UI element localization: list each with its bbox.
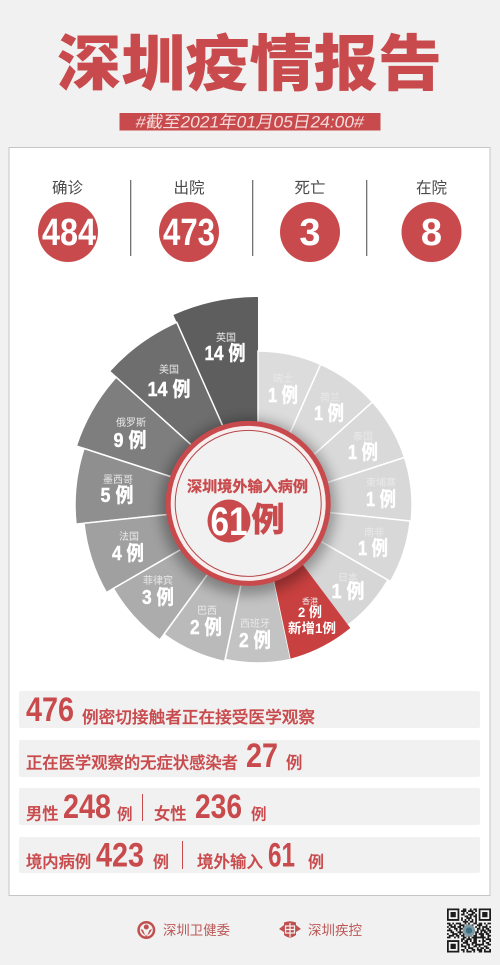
center badge: 深圳境外输入病例: [187, 476, 308, 496]
row: asymptomatic: 例: [286, 750, 302, 774]
stat: discharged: 出院: [173, 176, 205, 198]
row: close contacts: 例密切接触者正在接受医学观察: [82, 704, 316, 728]
wedge labels: 新增1例: [288, 620, 336, 636]
wedge labels: 4 例: [112, 542, 144, 565]
row: male and female: 女性: [154, 800, 187, 824]
stat: confirmed: 确诊: [52, 176, 83, 198]
footer logo: Shenzhen CDC: 深圳疾控: [308, 919, 362, 939]
row: male and female: 例: [251, 802, 267, 824]
center badge: [166, 421, 331, 586]
wedge labels: 3 例: [142, 586, 174, 609]
center badge: 61: [210, 500, 248, 544]
wedge labels: 瑞士: [273, 370, 293, 385]
row: close contacts: [19, 691, 480, 729]
wedge labels: 西班牙: [240, 615, 270, 630]
wedge labels: 1 例: [268, 384, 298, 407]
wedges: [75, 297, 412, 663]
wedge labels: 5 例: [100, 484, 134, 507]
row: domestic and imported: 境内病例: [26, 848, 91, 872]
wedge labels: 美国: [159, 361, 179, 376]
wedge labels: 1 例: [314, 402, 344, 425]
row: domestic and imported: 423: [96, 836, 144, 874]
wedge labels: 法国: [119, 528, 139, 543]
date banner: #截至2021年01月05日24:00#: [134, 113, 366, 131]
wedge labels: 1 例: [332, 580, 364, 603]
row: male and female: 男性: [26, 800, 59, 824]
row: male and female: 248: [63, 788, 111, 826]
wedge labels: 1 例: [366, 488, 396, 511]
row: domestic and imported: 61: [268, 836, 295, 874]
row: male and female: [19, 788, 480, 826]
title: 深圳疫情报告: [57, 14, 442, 103]
wedge labels: 南非: [364, 524, 384, 539]
stat: confirmed: 484: [42, 212, 96, 254]
row: domestic and imported: 境外输入: [197, 848, 263, 872]
wedge labels: 2 例: [239, 629, 271, 652]
row: male and female: 例: [117, 802, 133, 824]
wedge labels: 俄罗斯: [116, 414, 146, 429]
stat: in hospital: 8: [421, 212, 442, 254]
row: domestic and imported: 例: [308, 848, 324, 872]
stat: discharged: 473: [163, 212, 215, 254]
footer logo: Shenzhen health commission: 深圳卫健委: [163, 919, 230, 939]
main white card: [9, 148, 490, 896]
stat: in hospital: 在院: [416, 176, 447, 198]
stat: discharged: [159, 176, 219, 262]
wedge labels: 巴西: [197, 602, 217, 617]
wedge labels: 1 例: [348, 441, 378, 464]
wedge labels: 2 例: [190, 616, 222, 639]
stat: deaths: 3: [299, 212, 321, 254]
row: asymptomatic: 27: [246, 737, 278, 775]
wedge labels: 英国: [216, 329, 236, 344]
wedge labels: 14 例: [204, 342, 246, 365]
wedge labels: 2 例: [298, 604, 322, 620]
wedge labels: 香港: [302, 596, 318, 607]
wedge labels: 荷兰: [320, 389, 340, 404]
wedge labels: 日本: [338, 569, 358, 584]
row: asymptomatic: [19, 737, 480, 777]
row: domestic and imported: 例: [153, 848, 169, 872]
row: male and female: 236: [195, 788, 242, 826]
wedge labels: 1 例: [358, 537, 388, 560]
stat: confirmed: [38, 176, 98, 262]
wedge labels: [100, 329, 396, 652]
row: domestic and imported: [19, 836, 480, 874]
wedge labels: 9 例: [114, 429, 146, 452]
stat: in hospital: [402, 176, 462, 262]
stat: deaths: [280, 176, 340, 262]
QR code: [447, 908, 491, 952]
center badge: 例: [252, 493, 284, 541]
row: close contacts: 476: [26, 691, 74, 729]
wedge labels: 柬埔寨: [366, 474, 396, 489]
wedge labels: 泰国: [353, 428, 373, 443]
wedge labels: 菲律宾: [143, 572, 173, 587]
footer logo: Shenzhen CDC: [279, 919, 362, 939]
wedge labels: 14 例: [148, 378, 190, 401]
row: asymptomatic: 正在医学观察的无症状感染者: [26, 750, 238, 774]
stat: deaths: 死亡: [294, 176, 326, 198]
wedge labels: 墨西哥: [103, 471, 133, 486]
stats row: [38, 176, 462, 262]
radial chart: imported cases by country: [75, 297, 412, 663]
shadow: [160, 419, 336, 595]
